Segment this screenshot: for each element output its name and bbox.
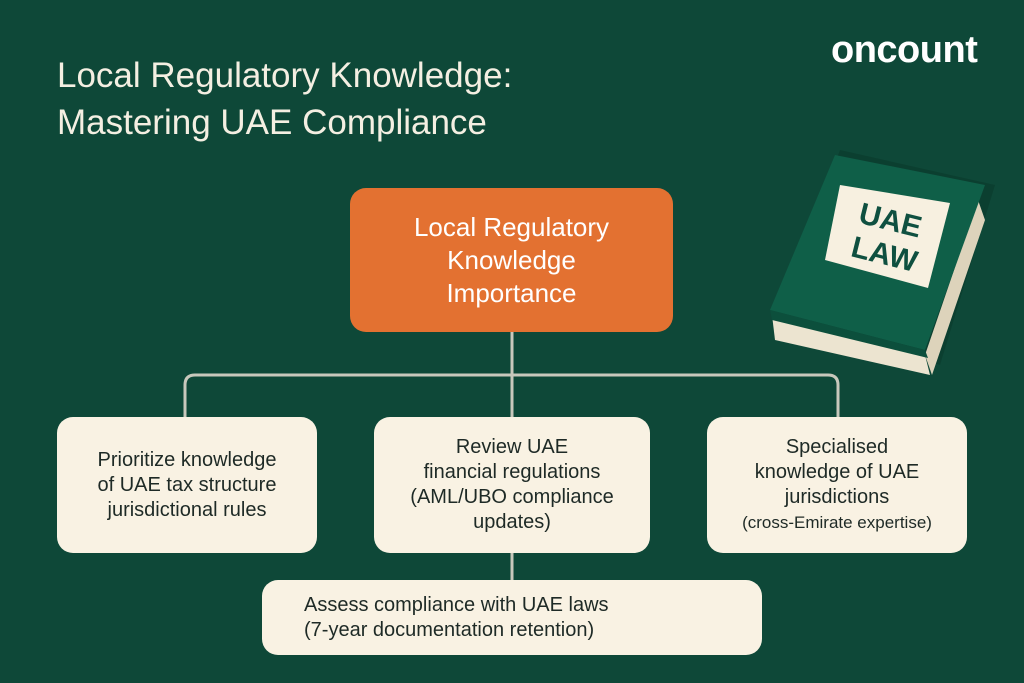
logo: oncount [831, 29, 977, 71]
card: jurisdictions: knowledge of UAE [755, 461, 919, 483]
icon: UAE law book: LAW [848, 231, 921, 279]
central box: Knowledge [447, 244, 576, 274]
icon: UAE law book: UAE [856, 197, 925, 244]
card: financial regulations: Review UAE [456, 436, 568, 458]
card: compliance [262, 580, 762, 655]
icon: UAE law book [770, 150, 994, 375]
card: financial regulations [374, 417, 650, 553]
central box: Local Regulatory [414, 212, 609, 242]
card: jurisdictions: (cross-Emirate expertise) [742, 513, 932, 532]
card: tax structure: of UAE tax structure [98, 474, 276, 496]
central box [350, 188, 673, 332]
card: financial regulations: financial regulations [424, 461, 600, 483]
central box: Importance [446, 278, 577, 308]
card: jurisdictions [707, 417, 967, 553]
card: tax structure [57, 417, 317, 553]
card: compliance: (7-year documentation retention) [304, 618, 594, 640]
card: tax structure: Prioritize knowledge [98, 448, 276, 470]
title: Local Regulatory Knowledge: [57, 56, 512, 95]
card: financial regulations: updates) [473, 511, 551, 533]
card: tax structure: jurisdictional rules [108, 498, 266, 520]
title [57, 56, 512, 142]
card: jurisdictions: Specialised [786, 436, 888, 458]
card: financial regulations: (AML/UBO compliance [410, 486, 614, 508]
card: jurisdictions: jurisdictions [785, 486, 889, 508]
card: compliance: Assess compliance with UAE laws [304, 594, 609, 616]
title: Mastering UAE Compliance [57, 103, 487, 142]
